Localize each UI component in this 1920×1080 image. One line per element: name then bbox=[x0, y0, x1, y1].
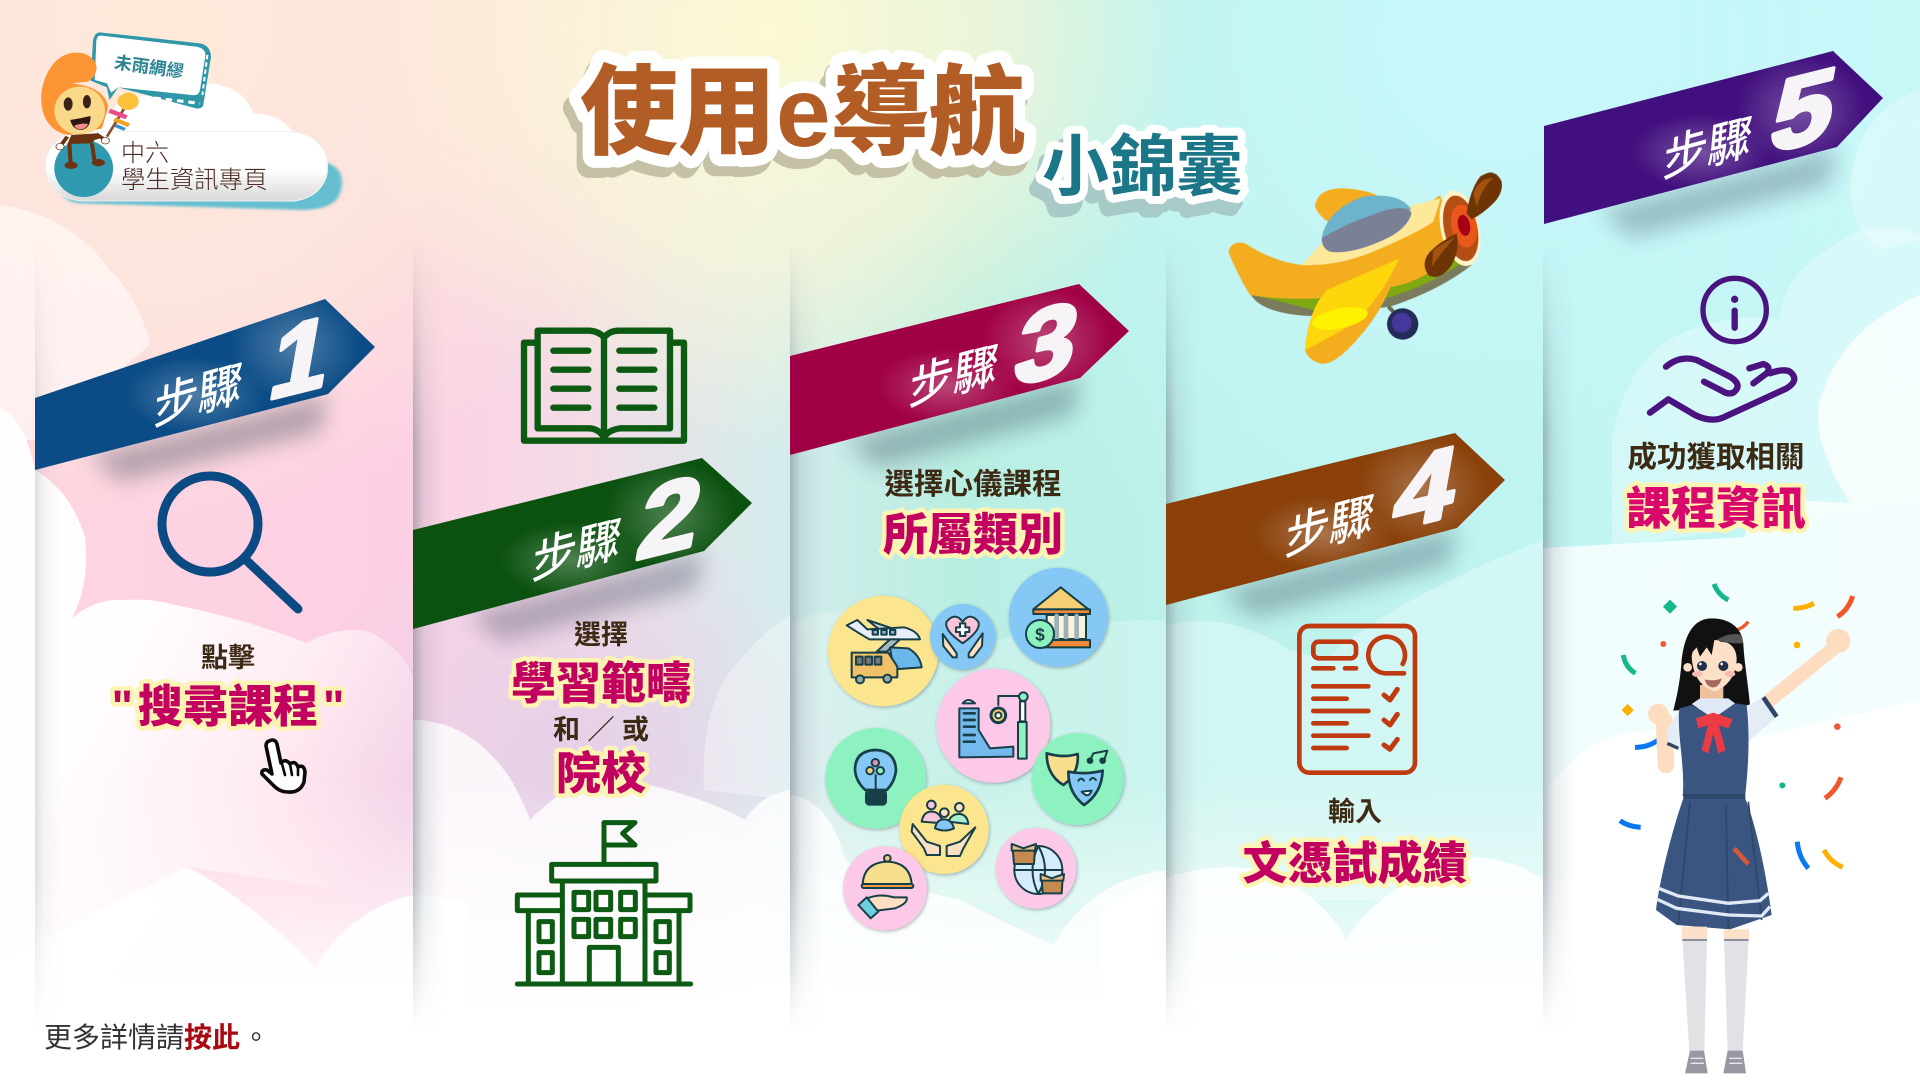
text: 輸入: 輸入 bbox=[1328, 797, 1382, 827]
title bbox=[574, 57, 1243, 218]
title shadow: 使用e導航 bbox=[574, 67, 1021, 177]
icon: engineering bbox=[936, 669, 1050, 783]
text: 搜尋課程: "搜尋課程" bbox=[112, 681, 344, 732]
banner: 步驟 2: 步驟 bbox=[530, 512, 624, 590]
text: 和／或: 和 ／ 或 bbox=[553, 715, 649, 745]
icon: social care bbox=[899, 785, 989, 874]
text: 文憑試成績: 文憑試成績 bbox=[1242, 838, 1468, 889]
banner: 步驟 3: 3 bbox=[1007, 277, 1087, 408]
banner: 步驟 5: 5 bbox=[1763, 45, 1844, 176]
footnote: 更多詳情請按此。 bbox=[44, 1022, 270, 1053]
text: 學習範疇: 學習範疇 bbox=[511, 658, 691, 709]
icon: health bbox=[930, 604, 995, 669]
text: 點擊: 點擊 bbox=[201, 643, 255, 673]
icon: airplane bbox=[1228, 173, 1502, 364]
icon: finance: $ bbox=[1035, 625, 1045, 645]
text: 學生資訊專頁: 學生資訊專頁 bbox=[121, 167, 267, 194]
panel: step 5 bbox=[1544, 45, 1883, 1073]
banner: 步驟 3 bbox=[790, 277, 1129, 468]
title main: 使用e導航 bbox=[580, 57, 1027, 167]
title shadow: 小錦囊 bbox=[1036, 143, 1237, 218]
icon: school building bbox=[517, 823, 691, 984]
icon: hand cursor bbox=[262, 740, 305, 792]
panel: step 1 bbox=[35, 290, 375, 792]
icon: information in hand bbox=[1650, 278, 1794, 420]
banner: 步驟 1: 步驟 bbox=[152, 356, 244, 436]
text: 選擇: 選擇 bbox=[574, 620, 628, 650]
banner: 步驟 5 bbox=[1544, 45, 1883, 238]
banner: 步驟 4: 4 bbox=[1386, 422, 1466, 553]
text: 成功獲取相關: 成功獲取相關 bbox=[1627, 441, 1805, 474]
icon: exam checklist bbox=[1299, 626, 1415, 773]
text: 院校: 院校 bbox=[556, 748, 646, 799]
banner: 步驟 1: 1 bbox=[262, 293, 339, 423]
icon: performing arts bbox=[1032, 733, 1124, 825]
text: 未雨綢繆: 未雨綢繆 bbox=[113, 52, 185, 82]
banner: 步驟 3: 步驟 bbox=[907, 338, 1001, 416]
title sub: 小錦囊 bbox=[1042, 130, 1243, 205]
text: 選擇心儀課程: 選擇心儀課程 bbox=[884, 468, 1062, 501]
icon: global trade bbox=[996, 828, 1076, 909]
banner: 步驟 2 bbox=[413, 451, 752, 642]
logo: 中六學生資訊專頁 mascot bbox=[41, 32, 342, 210]
panel: column edge shadows bbox=[35, 240, 1575, 1030]
title shadow bbox=[574, 67, 1237, 218]
banner: 步驟 1 bbox=[35, 290, 375, 482]
text: 所屬類別: 所屬類別 bbox=[883, 509, 1063, 560]
banner: 步驟 4: 步驟 bbox=[1283, 488, 1377, 566]
icon: hospitality bbox=[843, 846, 927, 930]
panel: step 4 bbox=[1166, 422, 1505, 889]
banner: 步驟 4 bbox=[1166, 422, 1505, 618]
icon: magnifier bbox=[162, 476, 298, 609]
category icons bbox=[825, 568, 1124, 930]
icon: science bulb bbox=[825, 728, 926, 829]
icon: transport bbox=[828, 596, 939, 706]
icon: open book bbox=[524, 331, 684, 441]
text: 中六: 中六 bbox=[121, 140, 169, 167]
panel: step 3 bbox=[790, 277, 1129, 930]
confetti bbox=[1620, 584, 1853, 868]
illustration: student bbox=[1648, 618, 1850, 1073]
panel: step 2 bbox=[413, 331, 752, 984]
banner: 步驟 2: 2 bbox=[630, 451, 710, 582]
icon: finance bbox=[1009, 568, 1108, 667]
text: 課程資訊: 課程資訊 bbox=[1626, 483, 1806, 534]
banner: 步驟 5: 步驟 bbox=[1661, 110, 1755, 188]
